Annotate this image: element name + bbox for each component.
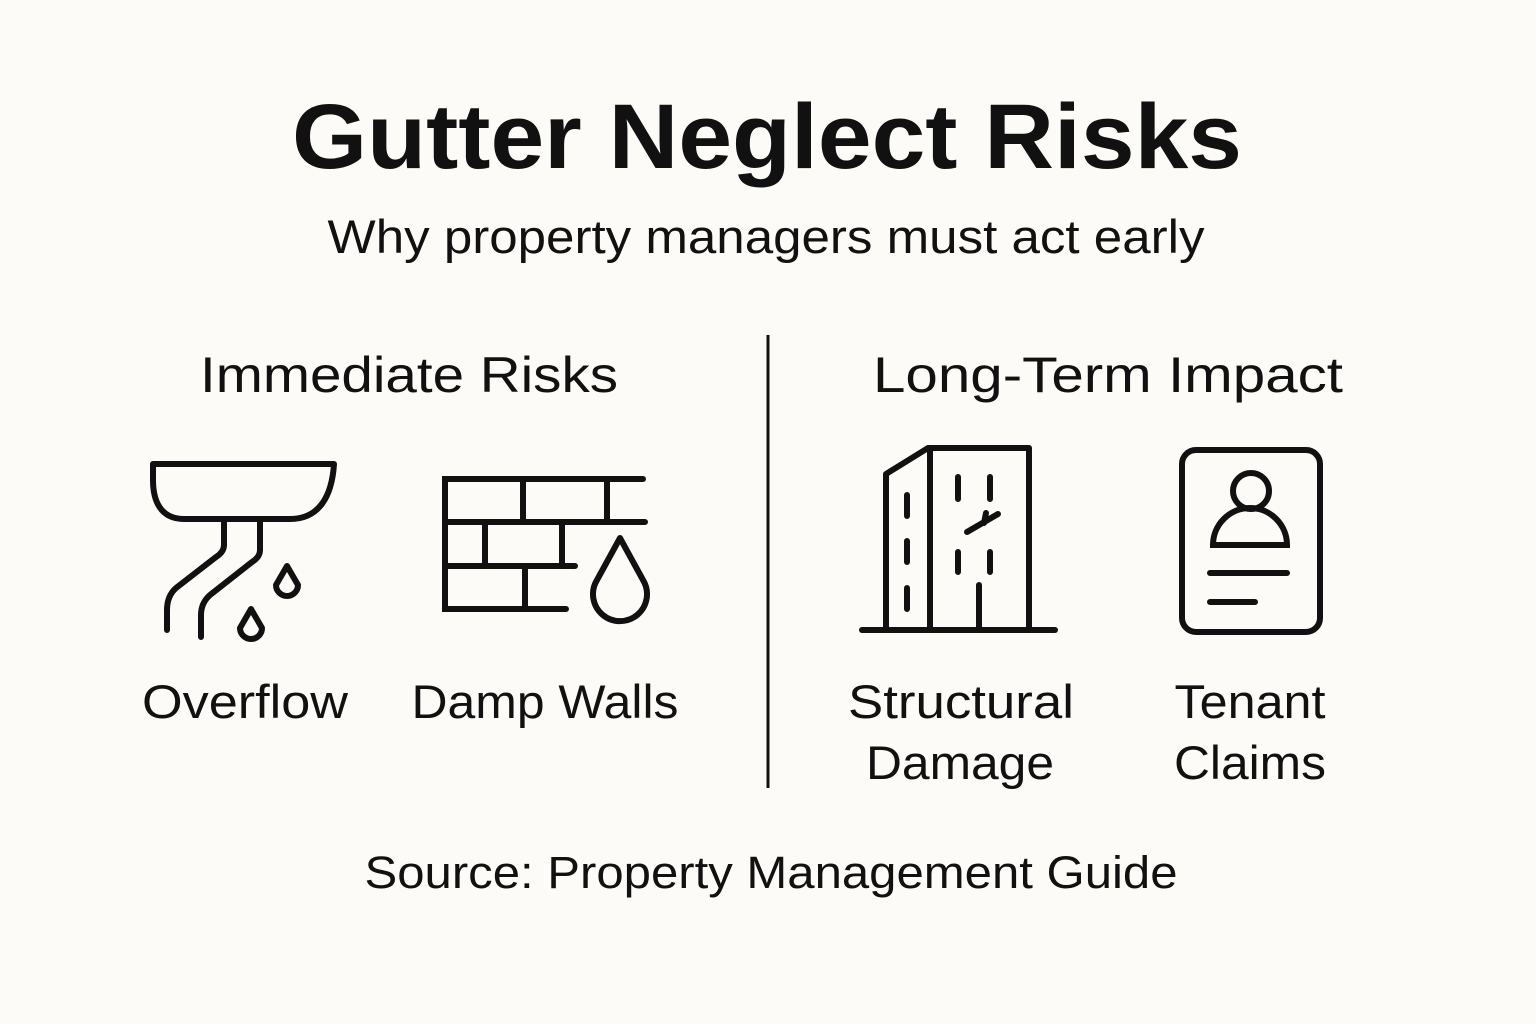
icon: tenant claim card bbox=[1182, 450, 1320, 632]
title: Gutter Neglect Risks bbox=[292, 86, 1242, 188]
heading: immediate risks: Immediate Risks bbox=[200, 347, 618, 403]
label: tenant claims: Tenant bbox=[1174, 675, 1326, 728]
icon: building bbox=[862, 448, 1055, 630]
label: damp walls: Damp Walls bbox=[412, 675, 678, 728]
heading: long-term impact: Long-Term Impact bbox=[873, 347, 1343, 403]
subtitle: Why property managers must act early bbox=[328, 210, 1205, 263]
label: tenant claims: Claims bbox=[1174, 736, 1326, 789]
label: overflow: Overflow bbox=[142, 675, 349, 728]
icon: damp brick wall bbox=[445, 479, 647, 621]
icon: gutter overflow bbox=[153, 464, 334, 639]
label: structural damage: Structural bbox=[848, 675, 1074, 728]
label: structural damage: Damage bbox=[866, 736, 1054, 789]
source: Source: Property Management Guide bbox=[364, 847, 1178, 898]
